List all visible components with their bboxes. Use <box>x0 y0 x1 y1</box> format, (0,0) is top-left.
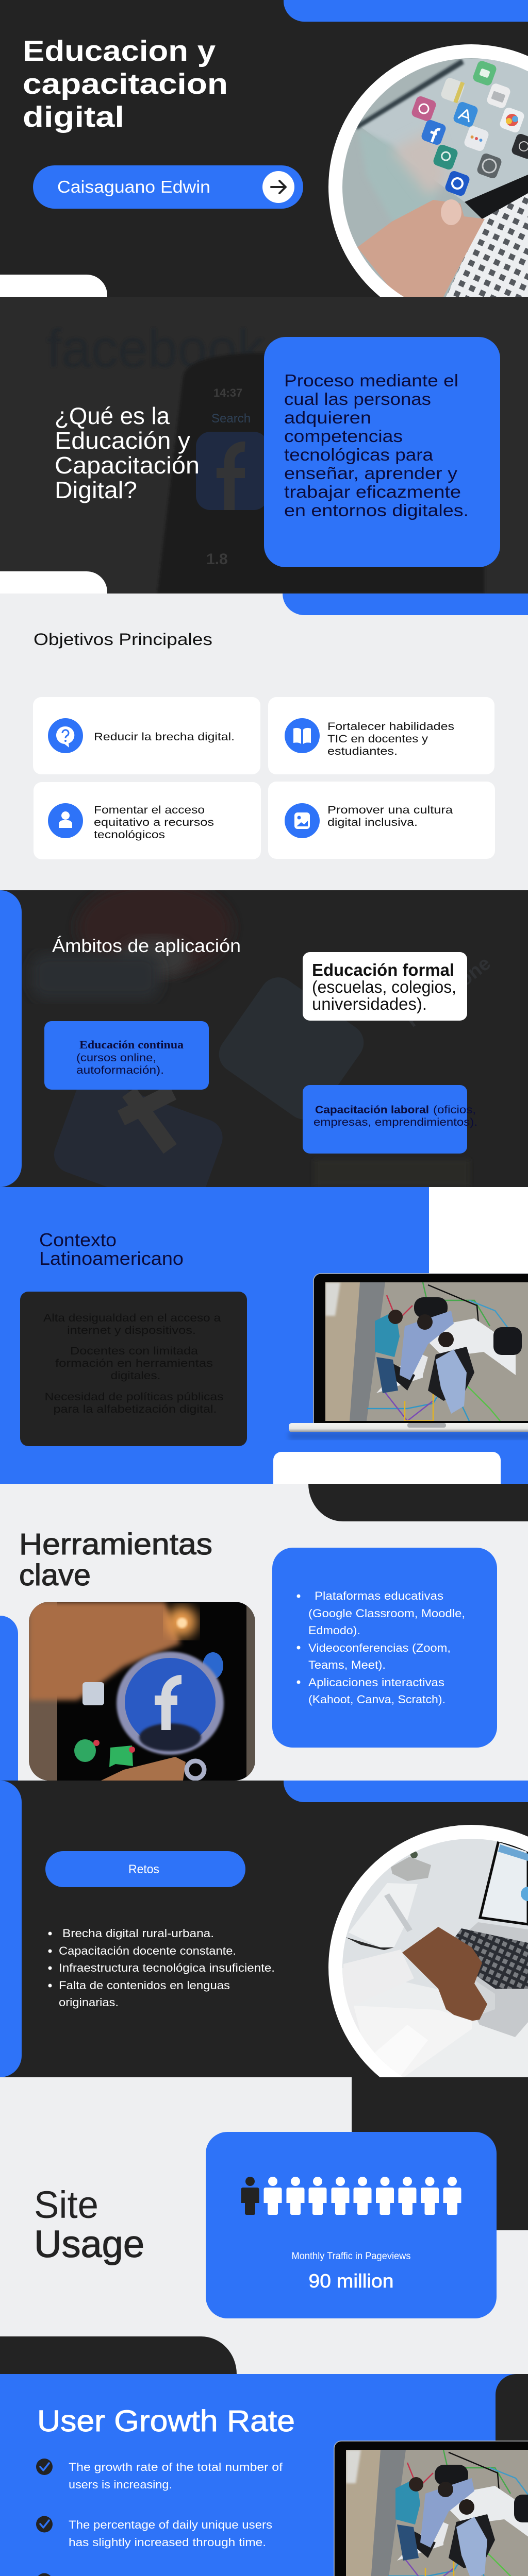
panel: definition: cual las personas <box>284 389 431 409</box>
decorative tab: herramientas left <box>0 1616 18 1781</box>
author pill: Caisaguano Edwin <box>57 177 210 196</box>
card: Educación continua: (cursos online, <box>76 1052 156 1064</box>
author pill <box>33 165 303 209</box>
card: Fomentar el acceso: tecnológicos <box>94 829 165 841</box>
item: daily unique users: has slightly increased through time. <box>69 2536 266 2549</box>
card: Educación continua: autoformación). <box>76 1064 164 1076</box>
decorative tab: retos top right <box>284 1781 528 1802</box>
list: retos: Falta de contenidos en lenguas <box>59 1979 230 1992</box>
card: Educación continua <box>44 1021 209 1090</box>
card: Fortalecer habilidades: TIC en docentes y <box>327 733 428 745</box>
title: digital <box>23 100 124 133</box>
section: retos background <box>0 1781 528 2077</box>
heading: ¿Qué es la Educación y Capacitación Digital?: Digital? <box>55 477 137 503</box>
panel: herramientas list: Plataformas educativas <box>315 1589 443 1602</box>
heading: ¿Qué es la Educación y Capacitación Digital?: ¿Qué es la <box>55 402 170 429</box>
panel: monthly traffic: Monthly Traffic in Pageviews <box>292 2251 410 2262</box>
card: Fortalecer habilidades: estudiantes. <box>327 745 398 757</box>
heading: ¿Qué es la Educación y Capacitación Digital?: Capacitación <box>55 452 200 479</box>
panel: herramientas list <box>272 1548 497 1748</box>
panel: definition: trabajar eficazmente <box>284 482 461 501</box>
heading: Contexto Latinoamericano <box>39 1229 184 1269</box>
card: Educación formal <box>303 952 467 1021</box>
heading: ¿Qué es la Educación y Capacitación Digital? <box>55 402 200 503</box>
heading: Objetivos Principales: Objetivos Principales <box>34 630 212 649</box>
heading: Site Usage: Usage <box>34 2223 144 2265</box>
heading: ¿Qué es la Educación y Capacitación Digital?: Educación y <box>55 427 190 454</box>
card: Reducir la brecha digital <box>33 697 260 774</box>
panel: herramientas list: Teams, Meet). <box>308 1658 386 1671</box>
decorative strip: retos left <box>0 1781 22 2077</box>
list: retos: Capacitación docente constante. <box>59 1944 236 1957</box>
photo: hands typing on laptop in circle <box>328 1825 528 2077</box>
decorative block: contexto top right <box>429 1187 528 1319</box>
section: herramientas background <box>0 1484 528 1781</box>
panel: definition: competencias <box>284 427 403 446</box>
panel: definition: tecnológicas para <box>284 445 434 464</box>
section: ¿Qué es? photo background: 1.8 <box>206 551 228 568</box>
section: site usage background <box>0 2077 528 2374</box>
card: Capacitación laboral: Capacitación laboral <box>315 1104 429 1116</box>
panel: herramientas list: (Kahoot, Canva, Scratch). <box>308 1693 446 1706</box>
title: Educacion y <box>23 35 216 67</box>
list: retos <box>48 1927 275 2009</box>
decorative tab: hero bottom left <box>0 275 107 297</box>
panel: contexto list: Necesidad de políticas públicas <box>44 1391 224 1403</box>
panel: monthly traffic <box>206 2132 497 2318</box>
section: ¿Qué es? photo background: 14:37 <box>213 386 242 399</box>
section: hero background <box>0 0 528 297</box>
panel: contexto list: para la alfabetización digital. <box>54 1403 217 1415</box>
panel: contexto list: Docentes con limitada <box>70 1345 198 1357</box>
section: ¿Qué es? photo background <box>0 297 528 594</box>
panel: contexto list: Alta desigualdad en el acceso a <box>43 1312 221 1324</box>
item: daily unique users: The percentage of daily unique users <box>69 2518 272 2531</box>
heading: Herramientas clave: Herramientas <box>19 1528 212 1561</box>
panel: definition: adquieren <box>284 408 371 427</box>
panel: definition: Proceso mediante el <box>284 371 458 390</box>
pill: Retos <box>45 1851 245 1887</box>
card: Reducir la brecha digital: Reducir la brecha digital. <box>94 731 235 743</box>
photo: laptop with team meeting <box>309 2441 528 2576</box>
decorative tab: herramientas top right <box>308 1484 528 1521</box>
section: contexto background <box>0 1187 528 1484</box>
decorative tab: objetivos top right <box>283 594 528 615</box>
section: ¿Qué es? photo background: Search <box>211 412 251 426</box>
card: Educación formal: universidades). <box>312 994 427 1013</box>
decorative strip: growth right <box>496 2374 528 2576</box>
section: ámbitos photo background <box>0 890 528 1187</box>
heading: Ámbitos de aplicación: Ámbitos de aplicación <box>52 935 241 956</box>
decorative tab: section 2 bottom left <box>0 571 107 594</box>
card: Fomentar el acceso: Fomentar el acceso <box>94 804 205 816</box>
item: growth rate <box>36 2459 283 2491</box>
card: Fomentar el acceso: equitativo a recursos <box>94 817 214 828</box>
panel: contexto list <box>20 1292 247 1446</box>
heading: Site Usage: Site <box>34 2183 98 2226</box>
panel: monthly traffic: 90 million <box>308 2270 394 2292</box>
panel: definition <box>264 337 500 567</box>
item: growth rate: The growth rate of the total number of <box>69 2461 283 2473</box>
decorative block: usage top right <box>352 2077 528 2230</box>
pill: Retos: Retos <box>128 1862 159 1876</box>
item: daily unique users <box>36 2516 272 2549</box>
heading: Contexto Latinoamericano: Contexto <box>39 1229 117 1250</box>
panel: definition: enseñar, aprender y <box>284 464 458 483</box>
title: capacitacion <box>23 67 228 100</box>
heading: Site Usage <box>34 2183 144 2265</box>
heading: Contexto Latinoamericano: Latinoamericano <box>39 1248 184 1269</box>
card: Promover una cultura <box>268 782 495 859</box>
heading: Herramientas clave: clave <box>19 1558 91 1592</box>
photo: magnifier over Facebook app <box>29 1602 255 1781</box>
card: Educación formal: Educación formal <box>312 960 454 979</box>
pictogram: ten people, one highlighted <box>241 2177 461 2215</box>
heading: User Growth Rate: User Growth Rate <box>37 2404 295 2438</box>
panel: herramientas list: Edmodo). <box>308 1624 360 1637</box>
photo: hand holding smartphone in circle <box>328 44 528 297</box>
decorative tab: contexto bottom <box>273 1452 501 1484</box>
title <box>23 35 228 133</box>
card: Educación formal: (escuelas, colegios, <box>312 977 456 996</box>
card: Capacitación laboral: (oficios, <box>433 1104 476 1116</box>
card: Educación continua: Educación continua <box>79 1038 184 1051</box>
panel: contexto list: formación en herramientas <box>55 1358 213 1369</box>
card: Fomentar el acceso <box>34 782 261 859</box>
card: Promover una cultura: Promover una cultura <box>327 804 453 816</box>
photo: laptop with team meeting <box>289 1274 528 1439</box>
card: Fortalecer habilidades: Fortalecer habilidades <box>327 721 454 733</box>
section: ¿Qué es? photo background: facebook <box>46 319 265 379</box>
card: Fortalecer habilidades <box>268 697 494 774</box>
panel: contexto list: internet y dispositivos. <box>67 1325 196 1336</box>
list: retos: Infraestructura tecnológica insuficiente. <box>59 1961 275 1974</box>
decorative tab: usage bottom left <box>0 2336 237 2374</box>
list: retos: originarias. <box>59 1996 119 2009</box>
item: growth rate: users is increasing. <box>69 2478 172 2491</box>
panel: herramientas list: (Google Classroom, Moodle, <box>308 1607 465 1620</box>
item: monthly traffic <box>36 2573 272 2576</box>
decorative tab: hero top right <box>284 0 528 22</box>
section: ámbitos photo background: PhotoTone <box>402 953 495 1031</box>
section: user growth background <box>0 2374 528 2576</box>
panel: herramientas list: Aplicaciones interactivas <box>308 1676 444 1689</box>
card: Capacitación laboral <box>303 1085 477 1154</box>
panel: definition: en entornos digitales. <box>284 501 469 520</box>
panel: contexto list: digitales. <box>110 1370 161 1382</box>
card: Capacitación laboral: empresas, emprendimientos). <box>314 1116 477 1128</box>
section: objetivos background <box>0 594 528 890</box>
heading: Herramientas clave <box>19 1528 212 1592</box>
panel: herramientas list: Videoconferencias (Zoom, <box>308 1641 451 1654</box>
list: retos: Brecha digital rural-urbana. <box>62 1927 214 1940</box>
decorative strip: ámbitos left <box>0 890 22 1187</box>
card: Promover una cultura: digital inclusiva. <box>327 817 418 828</box>
